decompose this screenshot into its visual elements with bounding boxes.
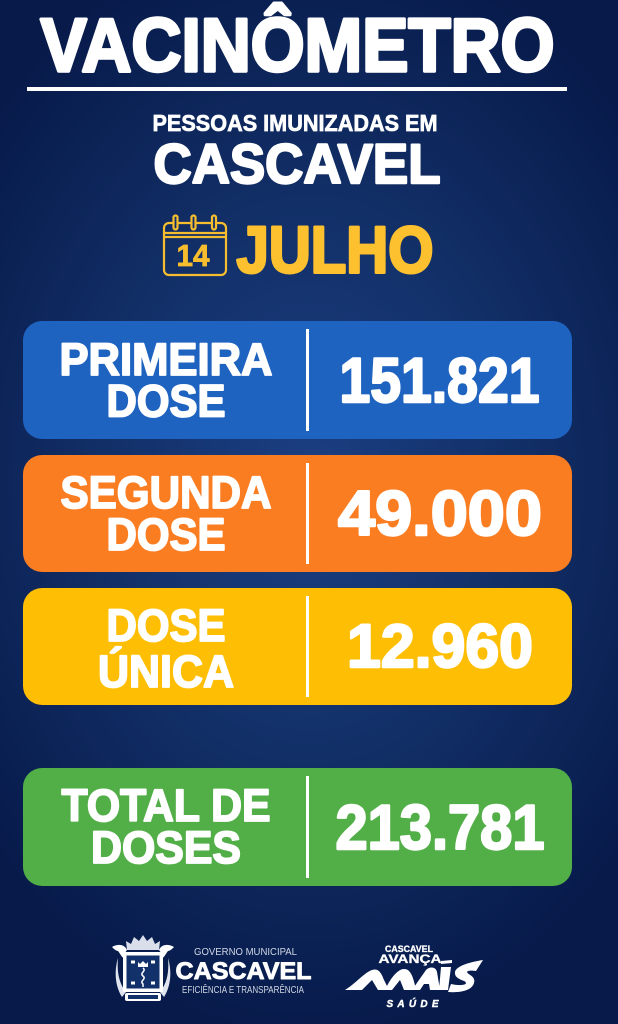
title: VACINÔMETRO	[40, 3, 554, 87]
government label: GOVERNO MUNICIPAL	[194, 946, 297, 958]
label: DOSE	[106, 376, 226, 426]
subtitle line 2: CASCAVEL	[154, 132, 440, 195]
date	[164, 212, 434, 286]
logo: cascavel avança mais saúde	[345, 944, 483, 1010]
label: DOSE	[106, 600, 226, 651]
panel: total de doses	[23, 768, 572, 886]
label	[60, 334, 272, 426]
label: DOSE	[106, 509, 226, 560]
value: 49.000	[338, 479, 542, 549]
label	[62, 780, 270, 873]
icon: mais wordmark	[345, 960, 483, 992]
logo: cascavel avança mais saúde: AVANÇA	[378, 952, 442, 966]
label: TOTAL DE	[62, 780, 270, 831]
label: SEGUNDA	[60, 467, 272, 518]
value: 213.781	[336, 793, 544, 863]
label	[98, 600, 234, 697]
label: PRIMEIRA	[60, 334, 272, 385]
panel: primeira dose	[23, 321, 572, 439]
label: DOSES	[91, 822, 241, 873]
value: 151.821	[340, 346, 540, 416]
calendar day: 14	[176, 238, 210, 273]
label: ÚNICA	[98, 646, 234, 697]
title underline	[27, 87, 567, 91]
subtitle line 1: PESSOAS IMUNIZADAS EM	[152, 110, 438, 136]
icon: calendar	[164, 216, 226, 275]
panel: segunda dose	[23, 455, 572, 572]
logo: governo municipal de cascavel	[112, 935, 312, 1001]
value: 12.960	[347, 612, 533, 680]
logo: cascavel avança mais saúde: SAÚDE	[386, 997, 439, 1010]
label	[60, 467, 272, 560]
icon: coat of arms	[112, 935, 174, 1001]
logo: cascavel avança mais saúde: CASCAVEL	[385, 944, 433, 955]
month: JULHO	[236, 212, 434, 286]
tagline: EFICIÊNCIA E TRANSPARÊNCIA	[182, 983, 304, 996]
subtitle	[152, 110, 440, 195]
panel: dose unica	[23, 588, 572, 705]
logo wordmark: CASCAVEL	[176, 958, 312, 985]
